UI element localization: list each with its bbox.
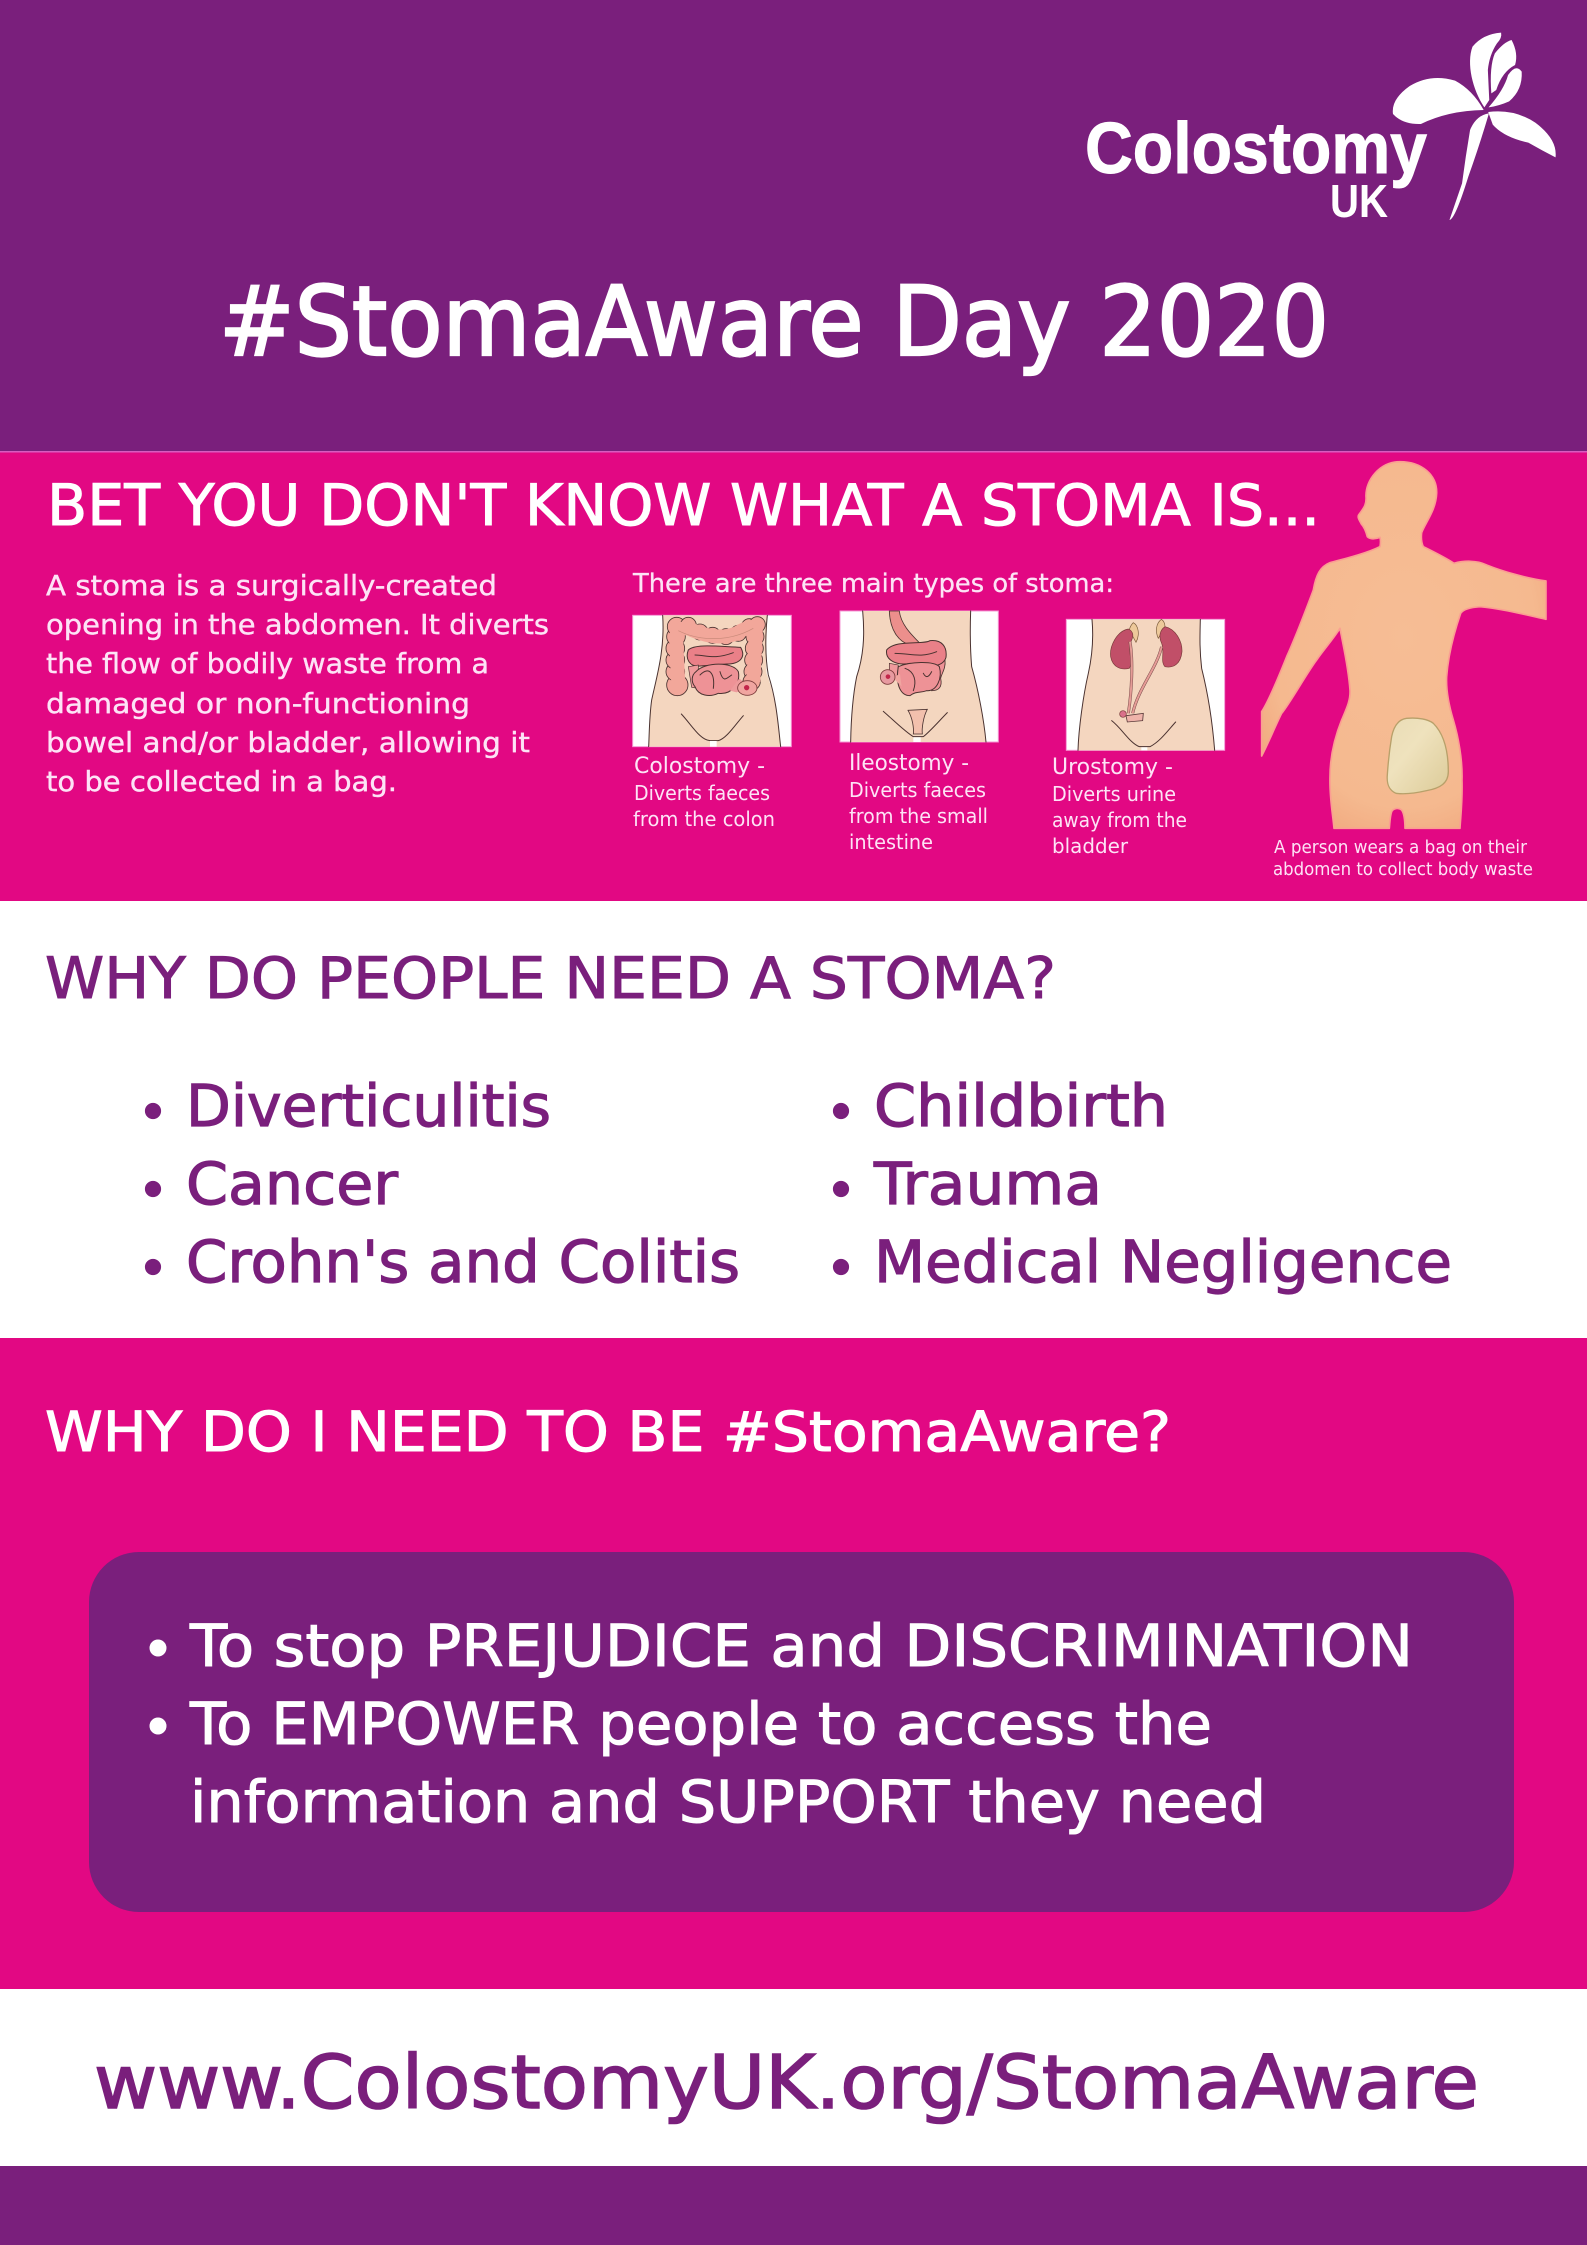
text: ileostomy caption — [849, 751, 988, 854]
text: urostomy caption: Urostomy - — [1052, 755, 1173, 780]
band: what is a stoma background — [0, 451, 1587, 901]
text: bag caption — [1273, 838, 1533, 880]
text block: stoma definition: damaged or non-functioning — [46, 687, 470, 720]
band: header background — [0, 0, 1587, 451]
band: website background — [0, 1989, 1587, 2166]
list: prejudice and empower — [150, 1612, 1413, 1836]
illustration: colostomy — [633, 615, 791, 747]
text: urostomy caption: away from the — [1052, 808, 1187, 832]
heading: why do people need a stoma: WHY DO PEOPLE NEED A STOMA? — [45, 946, 1056, 1012]
text: ileostomy caption: from the small — [849, 804, 988, 828]
text: colostomy caption — [633, 754, 775, 831]
list: reasons right column: Trauma — [873, 1150, 1102, 1218]
website url: www.ColostomyUK.org/StomaAware — [94, 2040, 1479, 2126]
list: prejudice and empower: information and SUPPORT they need — [190, 1768, 1266, 1836]
heading: bet you don't know: BET YOU DON'T KNOW WHAT A STOMA IS... — [47, 473, 1320, 539]
text block: stoma definition: bowel and/or bladder, allowing it — [46, 726, 530, 759]
list: reasons left column: Diverticulitis — [186, 1072, 551, 1140]
illustration: urostomy — [1066, 619, 1225, 750]
list: reasons left column — [146, 1072, 740, 1296]
text: urostomy caption: Diverts urine — [1052, 782, 1176, 806]
text block: stoma definition: the flow of bodily waste from a — [46, 647, 489, 680]
logo wordmark: Colostomy — [1085, 109, 1427, 189]
text: urostomy caption — [1052, 755, 1187, 858]
stoma bag — [1387, 718, 1448, 794]
text: ileostomy caption: Diverts faeces — [849, 778, 986, 802]
list: prejudice and empower: To EMPOWER people to access the — [189, 1690, 1212, 1758]
text block: stoma definition: to be collected in a bag. — [46, 765, 397, 798]
illustration: ileostomy — [840, 611, 998, 742]
band: why be stoma aware background — [0, 1338, 1587, 1989]
text block: stoma definition — [46, 569, 549, 798]
text block: stoma definition: opening in the abdomen. It diverts — [46, 608, 549, 641]
text: urostomy caption: bladder — [1052, 834, 1129, 858]
band: footer — [0, 2166, 1587, 2245]
text: bag caption: abdomen to collect body waste — [1273, 860, 1533, 880]
text: ileostomy caption: Ileostomy - — [849, 751, 969, 776]
logo UK: UK — [1330, 175, 1388, 227]
list: reasons left column: Cancer — [186, 1150, 398, 1218]
list: reasons right column: Childbirth — [874, 1072, 1168, 1140]
text: colostomy caption: Diverts faeces — [634, 781, 770, 805]
text block: stoma definition: A stoma is a surgically-created — [46, 569, 497, 602]
illustration: person wearing stoma bag — [1262, 462, 1546, 828]
text: colostomy caption: from the colon — [633, 807, 775, 831]
icon: iris flower — [1393, 33, 1556, 220]
title: #StomaAware Day 2020 — [219, 266, 1329, 378]
list: reasons left column: Crohn's and Colitis — [186, 1228, 740, 1296]
body silhouette — [1262, 462, 1546, 828]
text: three main types: There are three main types of stoma: — [632, 569, 1114, 599]
text: colostomy caption: Colostomy - — [634, 754, 765, 779]
band: why people need a stoma background — [0, 901, 1587, 1338]
heading: why be stoma aware: WHY DO I NEED TO BE #StomaAware? — [45, 1400, 1171, 1464]
text: ileostomy caption: intestine — [849, 830, 933, 854]
list: prejudice and empower: To stop PREJUDICE and DISCRIMINATION — [189, 1612, 1413, 1680]
list: reasons right column: Medical Negligence — [874, 1228, 1452, 1296]
text: bag caption: A person wears a bag on their — [1274, 838, 1528, 858]
logo: Colostomy UK — [1085, 33, 1556, 227]
panel: reasons to be aware — [89, 1552, 1514, 1912]
list: reasons right column — [834, 1072, 1452, 1296]
